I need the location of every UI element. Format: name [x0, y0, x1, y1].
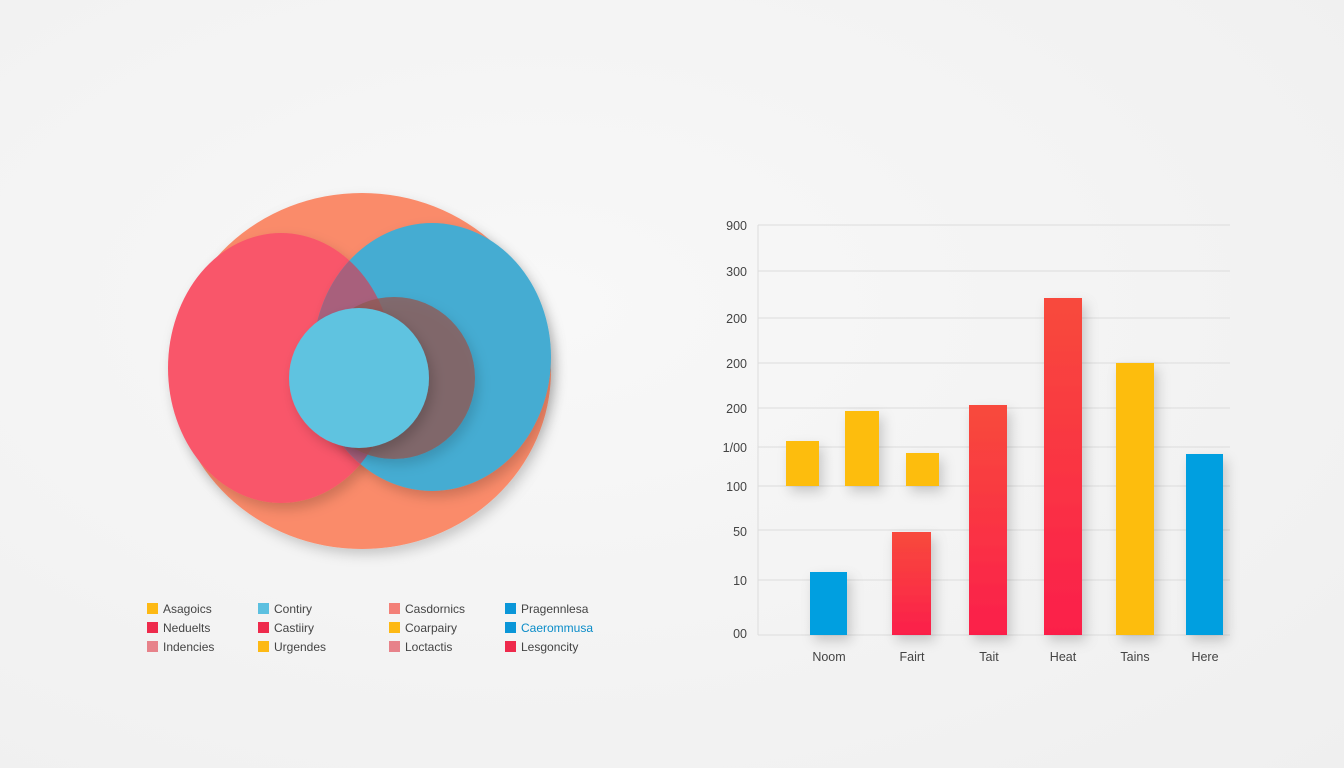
circle: orange — [173, 193, 551, 549]
y axis labels: 200 — [726, 357, 747, 371]
x axis labels: Fairt — [900, 650, 925, 664]
x axis labels: Tait — [979, 650, 999, 664]
x axis labels: Noom — [812, 650, 846, 664]
legend: Contiry — [274, 602, 312, 616]
bar chart — [723, 219, 1230, 664]
legend: Casdornics — [405, 602, 465, 616]
x axis labels: Heat — [1050, 650, 1077, 664]
y axis labels: 200 — [726, 312, 747, 326]
y axis labels: 10 — [733, 574, 747, 588]
circle: blue — [313, 223, 551, 491]
venn diagram — [166, 193, 1232, 661]
legend: Urgendes — [274, 640, 326, 654]
y axis labels: 300 — [726, 265, 747, 279]
y axis labels — [723, 219, 747, 641]
y axis labels: 50 — [733, 525, 747, 539]
legend: Lesgoncity — [521, 640, 578, 654]
y axis labels: 00 — [733, 627, 747, 641]
x axis labels: Here — [1191, 650, 1219, 664]
legend: Neduelts — [163, 621, 210, 635]
y axis labels: 100 — [726, 480, 747, 494]
legend: Asagoics — [163, 602, 212, 616]
overlap: red and blue — [317, 260, 384, 464]
legend: Castiiry — [274, 621, 314, 635]
legend: Pragennlesa — [521, 602, 588, 616]
circle: brown — [313, 297, 475, 459]
legend: Loctactis — [405, 640, 452, 654]
bars — [786, 298, 1223, 635]
legend — [147, 602, 594, 654]
x axis labels: Tains — [1120, 650, 1150, 664]
y axis labels: 1/00 — [723, 441, 747, 455]
y axis labels: 200 — [726, 402, 747, 416]
y axis labels: 900 — [726, 219, 747, 233]
legend: Caerommusa — [521, 621, 593, 635]
x axis labels — [812, 650, 1219, 664]
legend: Coarpairy — [405, 621, 457, 635]
circle: light blue — [289, 308, 429, 448]
circle: red — [168, 233, 394, 503]
legend: Indencies — [163, 640, 214, 654]
